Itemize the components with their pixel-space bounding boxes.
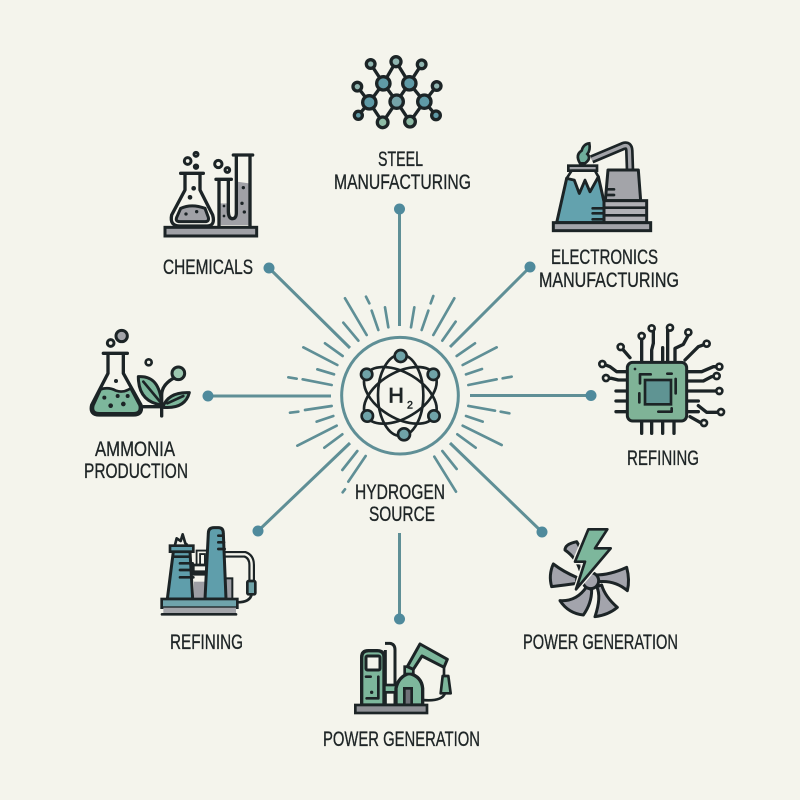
central hydrogen hub: 2 bbox=[407, 400, 413, 412]
label: power generation (right): POWER GENERATION bbox=[523, 631, 678, 654]
icon: factory (electronics manufacturing) bbox=[553, 143, 651, 231]
icon: refinery towers (refining) bbox=[162, 528, 255, 614]
label: electronics manufacturing bbox=[539, 246, 679, 292]
label: steel manufacturing: MANUFACTURING bbox=[334, 171, 471, 194]
icon: flask and plant (ammonia production) bbox=[91, 330, 189, 416]
label: electronics manufacturing: MANUFACTURING bbox=[539, 269, 679, 292]
label: hydrogen source: SOURCE bbox=[369, 503, 435, 526]
label: hydrogen source: HYDROGEN bbox=[355, 481, 445, 504]
label: electronics manufacturing: ELECTRONICS bbox=[551, 246, 658, 269]
central hydrogen hub bbox=[288, 296, 512, 492]
icon: turbine and lightning (power generation) bbox=[550, 529, 629, 617]
icon: microchip (refining) bbox=[599, 325, 724, 433]
label: hydrogen source bbox=[355, 481, 445, 526]
label: ammonia production: AMMONIA bbox=[95, 438, 175, 461]
label: steel manufacturing: STEEL bbox=[378, 148, 423, 171]
label: chemicals: CHEMICALS bbox=[163, 256, 253, 279]
label: steel manufacturing bbox=[334, 148, 471, 194]
label: power generation (bottom): POWER GENERATION bbox=[323, 728, 480, 751]
label: ammonia production: PRODUCTION bbox=[84, 460, 188, 483]
icon: flask and tubes (chemicals) bbox=[165, 152, 257, 236]
label: ammonia production bbox=[84, 438, 188, 483]
label: refining (left): REFINING bbox=[170, 631, 243, 654]
spokes connecting hub to industries bbox=[202, 204, 596, 624]
icon: molecule (steel manufacturing) bbox=[353, 57, 441, 128]
icon: hydrogen station (power generation) bbox=[355, 643, 451, 713]
central hydrogen hub: H bbox=[388, 384, 404, 408]
label: refining (right): REFINING bbox=[627, 447, 699, 470]
